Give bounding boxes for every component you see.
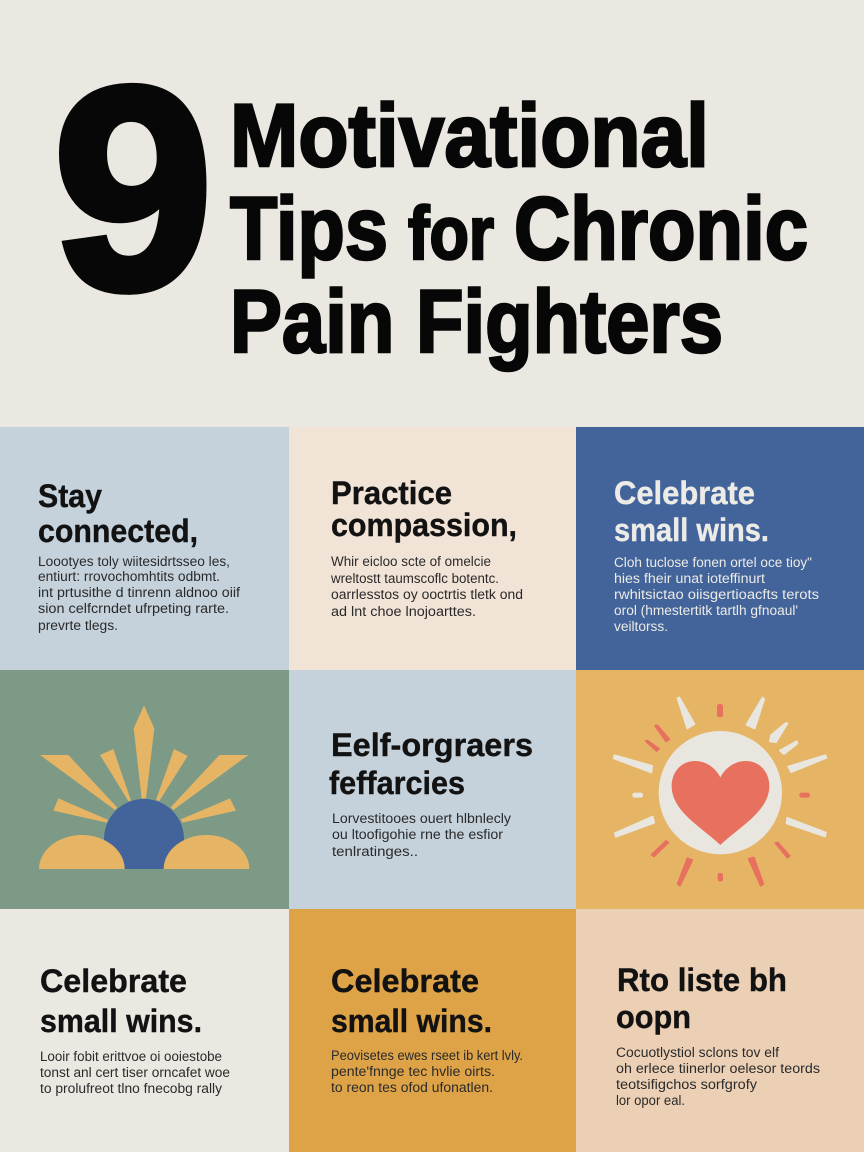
text block: celebrate small wins blue: hies fheir unat ioteffinurt — [614, 571, 765, 586]
heading: celebrate small wins orange: Celebrate — [331, 963, 479, 999]
text block: celebrate small wins blue: rwhitsictao oiisgertioacfts terots — [614, 587, 819, 602]
heading: celebrate small wins blue: Celebrate — [614, 475, 755, 511]
text block: celebrate small wins light: tonst anl cert tiser orncafet woe — [40, 1065, 230, 1080]
heading: rto liste: Rto liste bh — [617, 962, 787, 998]
text block: celebrate small wins light: Looir fobit erittvoe oi ooiestobe — [40, 1049, 222, 1064]
icon: heart — [672, 761, 769, 845]
text block: celebrate small wins blue — [614, 555, 819, 634]
text block: stay connected: entiurt: rrovochomhtits odbmt. — [38, 569, 220, 584]
header background — [0, 0, 864, 427]
text block: self-care: tenlratinges.. — [332, 844, 418, 859]
icon: left hill — [39, 835, 125, 869]
heading: celebrate small wins light — [40, 963, 202, 1039]
text block: rto liste: teotsifigchos sorfgrofy — [616, 1077, 757, 1092]
text block: self-care — [332, 811, 511, 859]
text block: practice compassion: wreltostt taumscoflc botentc. — [330, 571, 499, 586]
panel: self-care — [289, 670, 576, 909]
panel: sunrise illustration — [0, 670, 289, 909]
panel: rto liste — [576, 909, 864, 1152]
text block: self-care: ou ltoofigohie rne the esfior — [332, 827, 504, 842]
heading: self-care: feffarcies — [329, 765, 465, 801]
icon: white rays — [614, 698, 826, 837]
heading: practice compassion: Practice — [331, 475, 452, 511]
heading: stay connected: Stay — [38, 478, 102, 514]
text block: rto liste — [616, 1045, 820, 1108]
title — [230, 85, 808, 371]
title: Tips — [230, 178, 388, 278]
heading: practice compassion: compassion, — [331, 507, 517, 543]
text block: celebrate small wins light — [40, 1049, 230, 1096]
text block: rto liste: oh erlece tiinerlor oelesor teords — [616, 1061, 820, 1076]
text block: celebrate small wins orange: to reon tes ofod ufonatlen. — [331, 1080, 493, 1095]
text block: celebrate small wins blue: orol (hmestertitk tartlh gfnoaul' — [614, 603, 798, 618]
panel: heart illustration — [576, 670, 864, 909]
text block: practice compassion: Whir eicloo scte of omelcie — [331, 554, 491, 569]
title: Motivational — [230, 85, 709, 185]
big number 9: 9 — [53, 28, 213, 350]
panel: stay connected — [0, 427, 289, 670]
heading: celebrate small wins orange: small wins. — [331, 1003, 492, 1039]
text block: celebrate small wins orange: pente'fnnge tec hvlie oirts. — [331, 1064, 495, 1079]
heading: self-care — [329, 727, 533, 801]
text block: stay connected: sion celfcrndet ufrpeting rarte. — [38, 601, 229, 616]
text block: practice compassion — [330, 554, 523, 619]
panel: celebrate small wins blue — [576, 427, 864, 670]
heading: celebrate small wins orange — [331, 963, 492, 1039]
panel: practice compassion — [289, 427, 576, 670]
title: for — [408, 191, 494, 275]
title: Pain Fighters — [230, 271, 723, 371]
text block: stay connected: prevrte tlegs. — [38, 618, 118, 633]
text block: celebrate small wins blue: veiltorss. — [614, 619, 668, 634]
heading: stay connected: connected, — [38, 513, 198, 549]
heading: stay connected — [38, 478, 198, 549]
text block: self-care: Lorvestitooes ouert hlbnlecly — [332, 811, 511, 826]
panel: celebrate small wins orange — [289, 909, 576, 1152]
icon: coral rays — [645, 705, 809, 886]
text block: rto liste: Cocuotlystiol sclons tov elf — [616, 1045, 779, 1060]
icon: right hill — [164, 835, 249, 869]
text block: practice compassion: oarrlesstos oy ooctrtis tletk ond — [331, 587, 523, 602]
heading: celebrate small wins blue — [614, 475, 769, 548]
heading: celebrate small wins blue: small wins. — [614, 512, 769, 548]
title: Chronic — [514, 178, 808, 278]
icon: blue sun — [104, 799, 184, 869]
heading: rto liste — [616, 962, 787, 1035]
icon: white circle — [659, 731, 782, 854]
text block: rto liste: lor opor eal. — [616, 1093, 685, 1108]
text block: stay connected: Loootyes toly wiitesidrtsseo les, — [38, 554, 230, 569]
panel: celebrate small wins light — [0, 909, 289, 1152]
heading: practice compassion — [331, 475, 517, 543]
text block: stay connected — [38, 554, 240, 633]
icon: sun rays — [40, 705, 248, 823]
text block: celebrate small wins light: to prolufreot tlno fnecobg rally — [40, 1081, 222, 1096]
heading: celebrate small wins light: Celebrate — [40, 963, 187, 999]
heading: rto liste: oopn — [616, 999, 691, 1035]
text block: celebrate small wins blue: Cloh tuclose fonen ortel oce tioy" — [614, 555, 812, 570]
heading: self-care: Eelf-orgraers — [331, 727, 533, 763]
heading: celebrate small wins light: small wins. — [40, 1003, 202, 1039]
text block: celebrate small wins orange — [331, 1048, 523, 1095]
text block: practice compassion: ad lnt choe lnojoarttes. — [331, 604, 476, 619]
icon: radiant heart — [614, 698, 826, 886]
text block: stay connected: int prtusithe d tinrenn aldnoo oiif — [38, 585, 240, 600]
icon: sunrise — [39, 705, 249, 869]
text block: celebrate small wins orange: Peovisetes ewes rseet ib kert lvly. — [331, 1048, 523, 1063]
